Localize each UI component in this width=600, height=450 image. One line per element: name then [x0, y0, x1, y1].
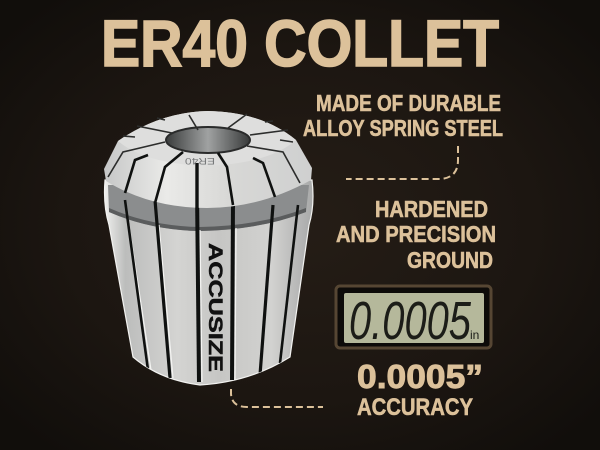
accuracy text: 0.0005” — [357, 358, 483, 395]
recessed groove band — [108, 185, 309, 231]
collet lower body — [104, 180, 313, 385]
feature text: material — [303, 90, 503, 141]
LCD unit: in — [470, 328, 479, 342]
body slot highlights — [128, 218, 236, 382]
readout frame — [336, 286, 491, 348]
title: ER40 COLLET — [101, 6, 499, 80]
feature text: hardened: GROUND — [407, 247, 493, 273]
dashed leader: material — [346, 146, 458, 179]
collet top cap — [104, 111, 312, 208]
cap slots — [108, 114, 300, 183]
cap front slots — [125, 152, 275, 208]
accuracy text — [357, 358, 483, 421]
LCD screen — [344, 293, 484, 343]
feature text: hardened — [336, 196, 496, 273]
ER40 engraving: ER40 — [185, 156, 215, 166]
centre hole — [166, 127, 250, 153]
brand name: ACCUSIZE — [204, 243, 225, 372]
feature text: hardened: HARDENED — [375, 196, 488, 222]
top face — [118, 111, 296, 166]
accuracy text: ACCURACY — [357, 394, 473, 421]
LCD value: 0.0005 — [349, 291, 472, 351]
collet illustration — [104, 111, 313, 385]
feature text: hardened: AND PRECISION — [336, 221, 496, 247]
digital readout — [336, 286, 491, 351]
feature text: material: MADE OF DURABLE — [316, 90, 501, 116]
body slots — [125, 190, 298, 382]
groove shadow — [109, 208, 306, 231]
feature text: material: ALLOY SPRING STEEL — [303, 115, 503, 141]
dashed leader: accuracy — [231, 389, 323, 407]
